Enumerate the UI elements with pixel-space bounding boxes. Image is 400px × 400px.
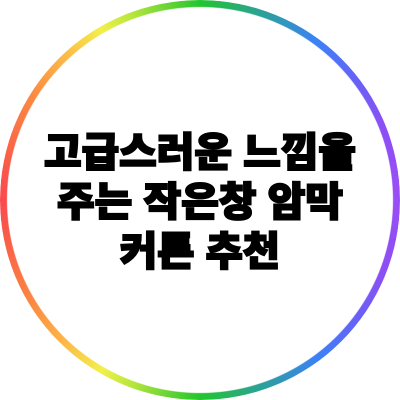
title line 2: 주는 작은창 암막 bbox=[57, 180, 343, 224]
title line 3: 커튼 추천 bbox=[120, 230, 280, 274]
title line 1: 고급스러운 느낌을 bbox=[44, 131, 356, 175]
